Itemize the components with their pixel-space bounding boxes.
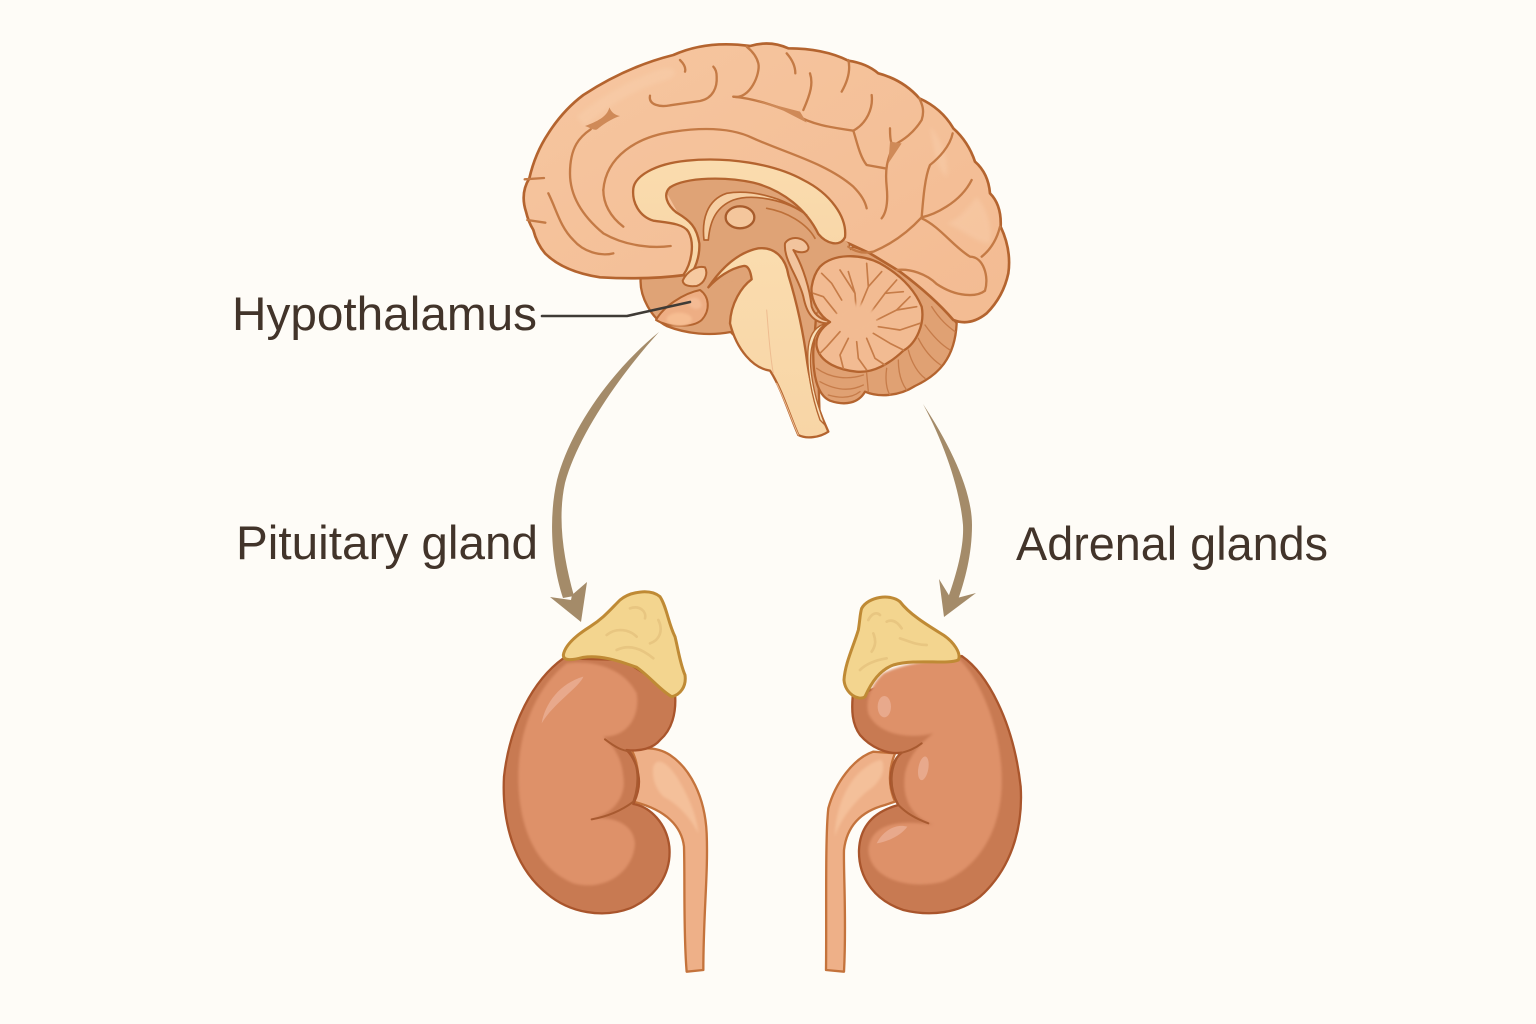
cerebellum with arbor vitae — [811, 256, 922, 372]
left ureter — [632, 748, 707, 972]
left kidney and adrenal — [504, 592, 707, 972]
hypothalamus — [656, 290, 708, 326]
right kidney hilum — [892, 743, 928, 823]
left kidney hilum — [592, 739, 637, 819]
fornix and thalamus — [703, 192, 815, 240]
left kidney body — [504, 658, 675, 913]
left adrenal gland — [563, 592, 685, 697]
right kidney and adrenal — [826, 597, 1021, 972]
sulcus wedges — [585, 107, 620, 130]
corpus callosum — [633, 160, 845, 277]
gyrus highlights — [577, 68, 991, 243]
thalamus region behind corpus callosum — [663, 175, 853, 317]
adrenal glands label: Adrenal glands — [1016, 517, 1328, 570]
right adrenal gland — [844, 597, 959, 698]
left kidney inner lobe — [518, 663, 637, 885]
right ureter — [826, 752, 895, 972]
right kidney body — [852, 656, 1021, 913]
interior of brain and hypothalamus base — [641, 180, 853, 427]
back lobes of cerebellum — [813, 247, 957, 403]
left kidney highlight — [542, 677, 583, 723]
sulci — [525, 47, 1000, 295]
hypothalamus leader line — [542, 302, 690, 316]
pituitary gland label: Pituitary gland — [236, 516, 538, 569]
brain — [524, 43, 1009, 437]
right ureter highlight — [835, 760, 883, 837]
right arrow: hypothalamus to adrenal — [923, 404, 976, 617]
right kidney inner lobe — [867, 660, 1002, 884]
cerebrum — [524, 43, 1009, 322]
hypothalamus label: Hypothalamus — [232, 287, 537, 340]
brainstem — [708, 248, 828, 437]
ureter highlight — [653, 761, 698, 833]
aqueduct strand — [785, 238, 828, 323]
left arrow: hypothalamus to pituitary — [550, 332, 659, 622]
right kidney highlights — [877, 696, 930, 843]
small loop above pituitary — [683, 267, 706, 286]
